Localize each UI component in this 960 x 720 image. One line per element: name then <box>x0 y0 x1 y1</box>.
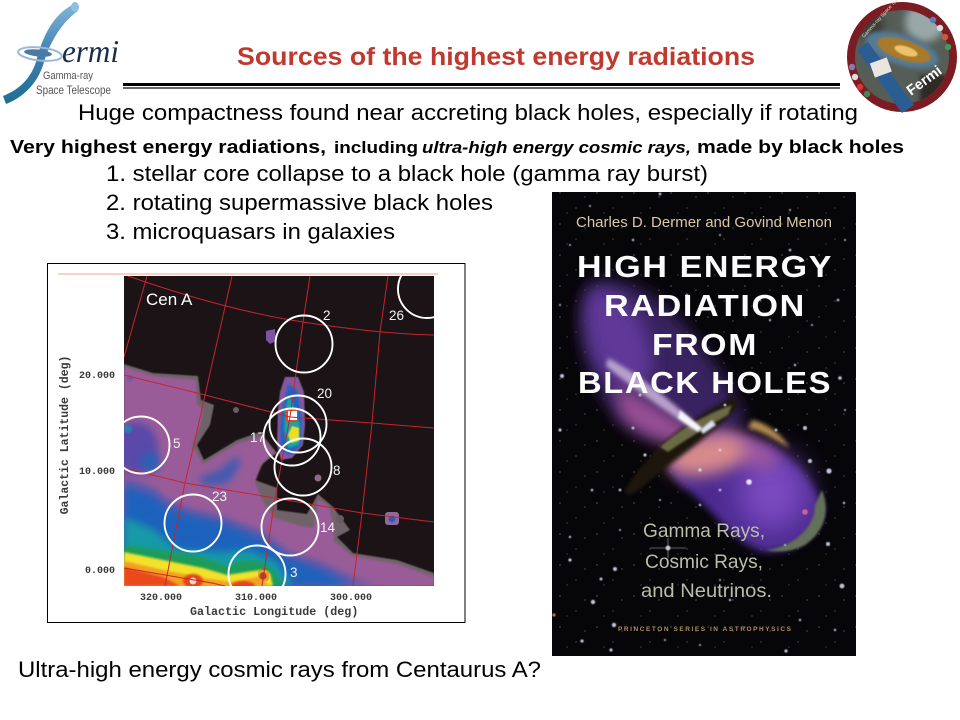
text: book title <box>577 249 833 400</box>
panel: book cover <box>552 192 856 656</box>
axis: galactic latitude: 0.000 <box>85 566 115 577</box>
labels: source numbers: 2 <box>323 308 331 323</box>
list: black hole sources: 3. microquasars in galaxies <box>106 219 395 244</box>
list: black hole sources: 1. stellar core collapse to a black hole (gamma ray burst) <box>106 161 708 186</box>
axis: galactic longitude: 320.000 <box>140 593 182 604</box>
list: black hole sources <box>106 161 708 244</box>
axis: galactic longitude <box>140 593 372 619</box>
axis: galactic latitude: Galactic Latitude (deg) <box>59 356 72 514</box>
text: highest energy statement: ultra-high energy cosmic rays, <box>422 139 691 157</box>
labels: source numbers: 26 <box>389 308 404 323</box>
labels: source numbers <box>146 290 404 580</box>
text: book title: RADIATION <box>604 288 806 323</box>
text: book series: PRINCETON SERIES IN ASTROPHYSICS <box>618 626 792 633</box>
text: compactness statement: Huge compactness found near accreting black holes, especially if rotating <box>78 100 858 125</box>
text: book title: HIGH ENERGY <box>577 249 833 284</box>
text: highest energy statement: including <box>334 139 418 157</box>
header double rule <box>123 83 840 89</box>
list: black hole sources: 2. rotating supermassive black holes <box>106 190 493 215</box>
text: book title: BLACK HOLES <box>578 365 832 400</box>
text: highest energy statement <box>10 136 904 157</box>
grid: galactic coordinate lines <box>124 276 434 586</box>
logo: Fermi Gamma-ray Space Telescope: Gamma-ray <box>43 70 93 82</box>
text: book subtitle <box>641 520 772 602</box>
logo: Fermi Gamma-ray Space Telescope: Space Telescope <box>36 85 111 97</box>
chart: sky map heat field <box>124 276 434 586</box>
labels: source numbers: 17 <box>250 430 265 445</box>
stars <box>552 193 846 653</box>
labels: source numbers: 8 <box>333 463 341 478</box>
labels: source numbers: 23 <box>212 489 227 504</box>
text: book subtitle: Gamma Rays, <box>643 520 765 542</box>
axis: galactic latitude <box>59 356 115 577</box>
title: Sources of the highest energy radiations <box>237 43 755 71</box>
axis: galactic longitude: 310.000 <box>235 593 277 604</box>
text: highest energy statement: Very highest energy radiations, <box>10 136 326 157</box>
labels: source numbers: 20 <box>317 386 332 401</box>
logo: Fermi Gamma-ray Space Telescope: ermi <box>62 33 119 69</box>
labels: source numbers: 5 <box>173 436 181 451</box>
artwork: Centaurus A nebula <box>552 192 856 656</box>
panel: Centaurus A sky map <box>48 260 465 622</box>
axis: galactic longitude: Galactic Longitude (deg) <box>190 605 358 619</box>
markers: numbered source circles <box>124 276 434 586</box>
text: book subtitle: Cosmic Rays, <box>645 551 763 573</box>
text: book authors: Charles D. Dermer and Govind Menon <box>576 214 832 231</box>
caption: Centaurus A question: Ultra-high energy cosmic rays from Centaurus A? <box>18 657 541 682</box>
icon: Fermi mission patch <box>847 0 957 113</box>
icon: Fermi mission patch: Fermi <box>904 63 945 99</box>
jet: Centaurus A core <box>277 377 305 460</box>
labels: source numbers: 3 <box>290 565 298 580</box>
text: book subtitle: and Neutrinos. <box>641 580 772 602</box>
axis: galactic longitude: 300.000 <box>330 593 372 604</box>
text: highest energy statement: made by black holes <box>697 136 904 157</box>
axis: galactic latitude: 20.000 <box>79 371 115 382</box>
axis: galactic latitude: 10.000 <box>79 467 115 478</box>
labels: source numbers: 14 <box>320 520 336 535</box>
text: book title: FROM <box>652 327 758 362</box>
logo: Fermi Gamma-ray Space Telescope <box>3 2 119 104</box>
labels: source numbers: Cen A <box>146 290 193 309</box>
